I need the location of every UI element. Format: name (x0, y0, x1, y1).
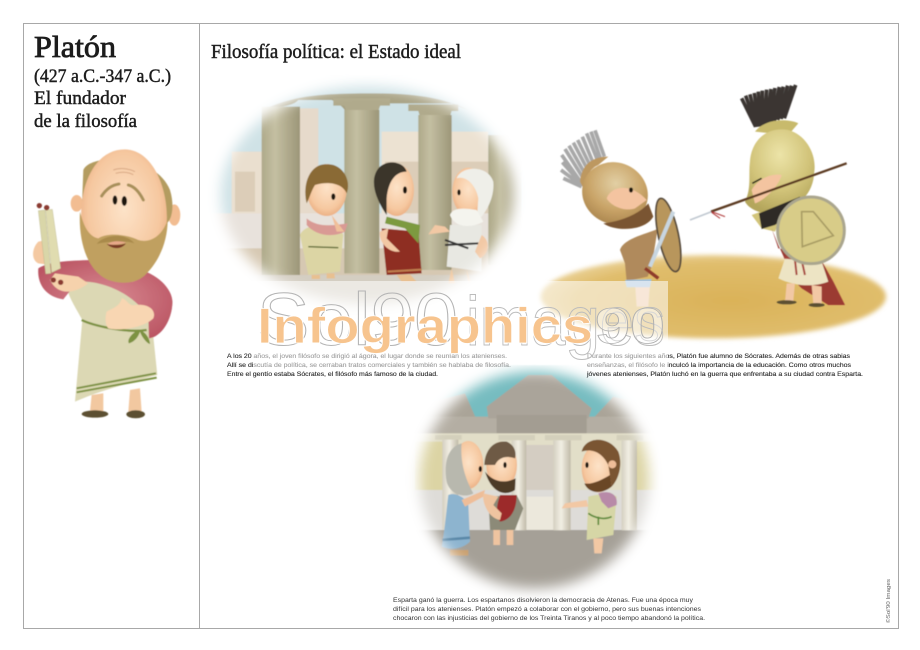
figure: bearded man in red and grey (483, 441, 523, 545)
watermark text: 90 (595, 298, 665, 354)
watermark text: Sol90 (257, 278, 458, 361)
caption: agora: Entre el gentío estaba Sócrates, el filósofo más famoso de la ciudad. (227, 371, 438, 378)
scene: agora with columns (215, 80, 521, 307)
sand ground (541, 255, 886, 338)
caption: aftermath of the war: chocaron con las injusticias del gobierno de los Treinta Tiranos y al poco tiempo abandonó la política. (393, 615, 705, 622)
caption: agora (227, 353, 511, 378)
scene: Greek warriors in battle (541, 85, 886, 338)
copyright credit: ©Sol'90 Images (885, 579, 892, 623)
caption: war (586, 353, 863, 378)
figure: young Plato (300, 164, 348, 279)
illustration: Plato portrait (33, 149, 180, 418)
sidebar title: Platón: El fundador (34, 88, 127, 109)
figure: warrior with spear and shield (690, 85, 847, 307)
figure: warrior with sword (561, 130, 686, 307)
caption: agora: A los 20 años, el joven filósofo se dirigió al ágora, el lugar donde se reunían los atenienses. (227, 353, 507, 360)
figure: old Socrates in white (428, 168, 493, 283)
watermark panel (253, 281, 668, 371)
watermark text (257, 278, 665, 361)
sidebar title: Platón: Platón (34, 29, 117, 64)
section heading: Filosofía política: el Estado ideal (211, 41, 461, 63)
sidebar title: Platón: de la filosofía (34, 111, 138, 132)
sidebar title: Platón (34, 29, 171, 132)
caption: aftermath of the war: difícil para los atenienses. Platón empezó a colaborar con el gobierno, pero sus buenas intenciones (393, 606, 701, 613)
scene: city square with three men (405, 365, 665, 603)
figure: politician in red (374, 162, 422, 282)
caption: aftermath of the war: Esparta ganó la guerra. Los espartanos disolvieron la democracia de Atenas. Fue una época muy (393, 597, 694, 604)
caption: war: Durante los siguientes años, Platón fue alumno de Sócrates. Además de otras sabias (587, 353, 850, 360)
figure: old man in blue (442, 441, 485, 556)
caption: war: enseñanzas, el filósofo le inculcó la importancia de la educación. Como otros muchos (587, 362, 851, 369)
caption: agora: Allí se discutía de política, se cerraban tratos comerciales y también se hablaba de filosofía. (227, 362, 511, 369)
watermark text: images (466, 282, 665, 360)
figure: man in green tunic (562, 440, 620, 553)
sidebar title: Platón: (427 a.C.-347 a.C.) (34, 66, 171, 87)
watermark text: Infographics (257, 298, 593, 354)
caption: aftermath of the war (393, 597, 705, 622)
caption: war: jóvenes atenienses, Platón luchó en la guerra que enfrentaba a su ciudad contra Esparta. (586, 371, 863, 378)
